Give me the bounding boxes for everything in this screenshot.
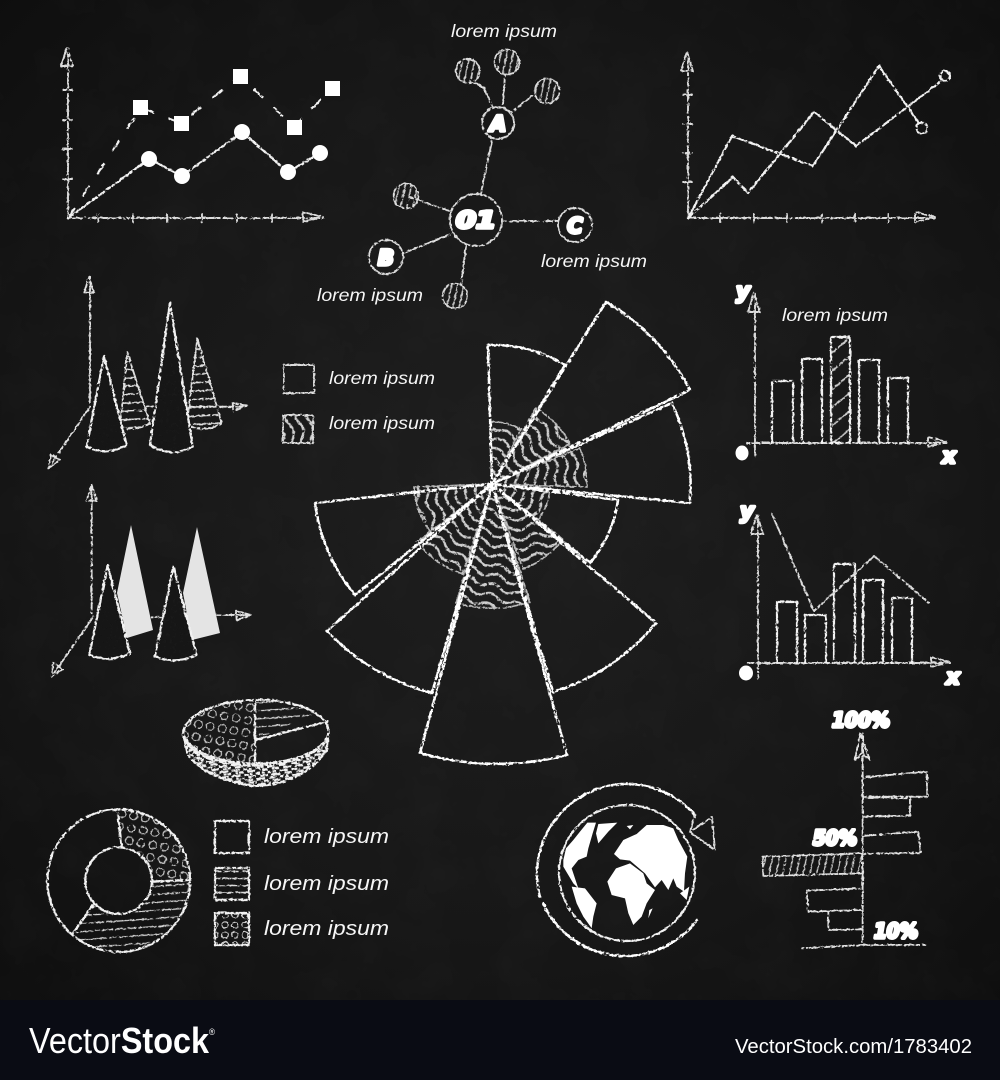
panel: network diagram: lorem ipsum bbox=[541, 251, 647, 271]
panel: upper bar chart: y bbox=[736, 279, 751, 303]
legend: cone chart keys bbox=[283, 365, 435, 443]
panel: network diagram: lorem ipsum bbox=[451, 21, 557, 41]
panel: lower bar and line chart: y bbox=[740, 499, 755, 523]
panel: network diagram bbox=[317, 21, 647, 308]
panel: horizontal percent bar chart bbox=[763, 708, 927, 948]
panel: solid cone chart bbox=[52, 485, 251, 677]
panel: globe with rotating arrow bbox=[537, 784, 715, 956]
panel: horizontal percent bar chart: 50% bbox=[813, 826, 857, 850]
legend: cone chart keys: lorem ipsum bbox=[329, 368, 435, 388]
panel: horizontal percent bar chart: 10% bbox=[874, 919, 918, 943]
panel: network diagram: A bbox=[488, 112, 506, 136]
panel: lower bar and line chart bbox=[739, 499, 961, 689]
panel: network diagram: 01 bbox=[456, 208, 496, 234]
legend: donut chart keys: lorem ipsum bbox=[264, 873, 389, 895]
panel: hatched cone chart bbox=[48, 277, 247, 468]
footer: brand logo: VectorStock bbox=[29, 1020, 219, 1061]
footer bar bbox=[0, 1000, 1000, 1080]
panel: zigzag line chart bbox=[681, 52, 950, 222]
panel: double line chart with markers bbox=[61, 48, 340, 222]
panel: donut chart bbox=[47, 809, 190, 952]
footer: brand logo: ® bbox=[209, 1027, 215, 1037]
panel: network diagram: lorem ipsum bbox=[317, 285, 423, 305]
panel: network diagram: C bbox=[567, 214, 583, 238]
panel: upper bar chart: lorem ipsum bbox=[782, 305, 888, 325]
legend: cone chart keys: lorem ipsum bbox=[329, 413, 435, 433]
footer: image reference: VectorStock.com/1783402 bbox=[735, 1036, 972, 1058]
panel: upper bar chart: x bbox=[941, 444, 957, 468]
panel: polar area chart bbox=[315, 302, 691, 764]
legend: donut chart keys: lorem ipsum bbox=[264, 826, 389, 848]
icon: world continents bbox=[563, 823, 689, 928]
legend: donut chart keys: lorem ipsum bbox=[264, 918, 389, 940]
panel: horizontal percent bar chart: 100% bbox=[832, 708, 890, 732]
panel: 3D pie chart bbox=[182, 699, 329, 786]
legend: donut chart keys bbox=[215, 821, 389, 945]
panel: upper bar chart bbox=[736, 279, 957, 468]
panel: network diagram: B bbox=[378, 246, 394, 270]
panel: lower bar and line chart: x bbox=[945, 665, 961, 689]
